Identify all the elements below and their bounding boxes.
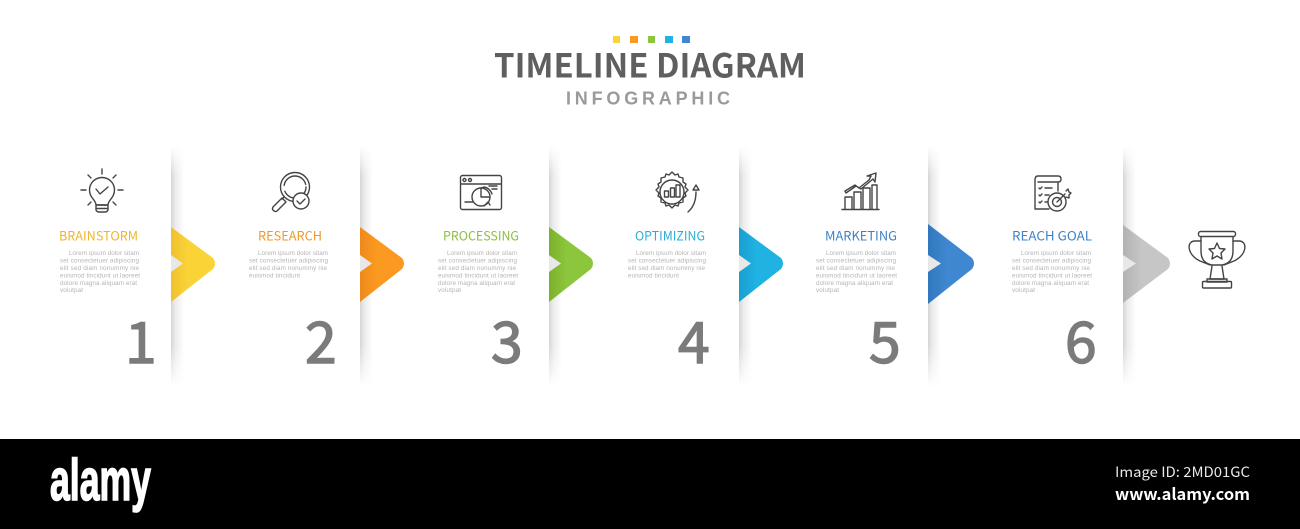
body text	[60, 250, 140, 294]
body text: set consectetuer adipiscing	[1012, 258, 1091, 264]
number: 2	[305, 298, 337, 380]
body text	[438, 250, 518, 294]
number: 5	[869, 298, 901, 380]
subtitle: INFOGRAPHIC	[566, 88, 730, 108]
arrow 3	[549, 227, 593, 302]
arrow 4	[739, 227, 783, 302]
body text: Lorem ipsum dolor sitam	[258, 250, 328, 257]
body text: volutpat	[816, 287, 839, 294]
body text: elit sed diam nonummy nie	[249, 265, 327, 272]
body text: elit sed diam nonummy nie	[1012, 265, 1090, 272]
alamy logo: alamy	[50, 448, 151, 513]
number: 1	[125, 298, 157, 380]
body text: set consectetuer adipiscing	[816, 258, 896, 264]
body text	[249, 250, 328, 280]
body text: Lorem ipsum dolor sitam	[636, 250, 706, 257]
icon: trophy	[1189, 232, 1245, 288]
number: 3	[491, 298, 523, 380]
body text: set consectetuer adipiscing	[438, 258, 517, 264]
body text	[816, 250, 897, 294]
heading: RESEARCH	[258, 226, 322, 244]
body text: volutpat	[60, 287, 83, 294]
body text: set consectetuer adipiscing	[628, 258, 706, 264]
body text: euismod tincidunt ut laoreet	[816, 272, 897, 280]
icon: magnifier with check	[272, 172, 310, 212]
arrow 5	[928, 224, 974, 304]
heading: BRAINSTORM	[59, 226, 138, 244]
number: 4	[678, 298, 710, 380]
body text: euismod tincidunt	[628, 272, 679, 280]
image id: Image ID: 2MD01GC	[1115, 462, 1250, 482]
body text: elit sed diam nonummy nie	[438, 265, 516, 272]
icon: checklist with target	[1035, 176, 1071, 211]
body text: set consectetuer adipiscing	[249, 258, 328, 264]
body text: set consectetuer adipiscing	[60, 258, 139, 264]
body text: volutpat	[1012, 287, 1035, 294]
body text: elit sed diam nonummy nie	[628, 265, 705, 272]
arrow 2	[360, 227, 404, 302]
body text: euismod tincidunt ut laoreet	[438, 272, 518, 280]
body text: elit sed diam nonummy nie	[816, 265, 895, 272]
body text: euismod tincidunt	[249, 272, 300, 280]
panel 6: reach goal	[1012, 176, 1097, 380]
icon: growth chart	[842, 173, 879, 210]
body text: Lorem ipsum dolor sitam	[447, 250, 517, 257]
panel 5: marketing	[816, 173, 901, 380]
arrow 6	[1123, 225, 1170, 303]
colour squares	[613, 36, 690, 43]
panel 2: research	[249, 172, 337, 380]
panel 1: brainstorm	[59, 169, 157, 380]
body text: euismod tincidunt ut laoreet	[1012, 272, 1092, 280]
icon: gear with bars	[656, 172, 699, 212]
number: 6	[1065, 298, 1097, 380]
website: www.alamy.com	[1115, 481, 1250, 505]
panel 3: processing	[438, 176, 523, 380]
footer bar	[0, 439, 1300, 529]
heading: PROCESSING	[443, 226, 519, 244]
heading: MARKETING	[825, 226, 897, 244]
body text: dolore magna aliquam erat	[1012, 280, 1089, 287]
body text: dolore magna aliquam erat	[60, 280, 137, 287]
body text: Lorem ipsum dolor sitam	[826, 250, 896, 257]
icon: light bulb	[81, 169, 123, 212]
body text: Lorem ipsum dolor sitam	[69, 250, 139, 257]
heading: OPTIMIZING	[635, 226, 705, 244]
title: TIMELINE DIAGRAM	[494, 40, 806, 88]
body text	[628, 250, 706, 280]
panel 4: optimizing	[628, 172, 710, 380]
body text: Lorem ipsum dolor sitam	[1021, 250, 1091, 257]
body text: dolore magna aliquam erat	[438, 280, 515, 287]
panel shadows	[165, 146, 1145, 387]
heading: REACH GOAL	[1012, 226, 1092, 244]
icon: browser with pie chart	[460, 176, 502, 210]
body text: dolore magna aliquam erat	[816, 280, 893, 287]
arrow 1	[171, 227, 215, 302]
body text: volutpat	[438, 287, 461, 294]
body text	[1012, 250, 1092, 294]
body text: elit sed diam nonummy nie	[60, 265, 139, 272]
body text: euismod tincidunt ut laoreet	[60, 272, 140, 280]
